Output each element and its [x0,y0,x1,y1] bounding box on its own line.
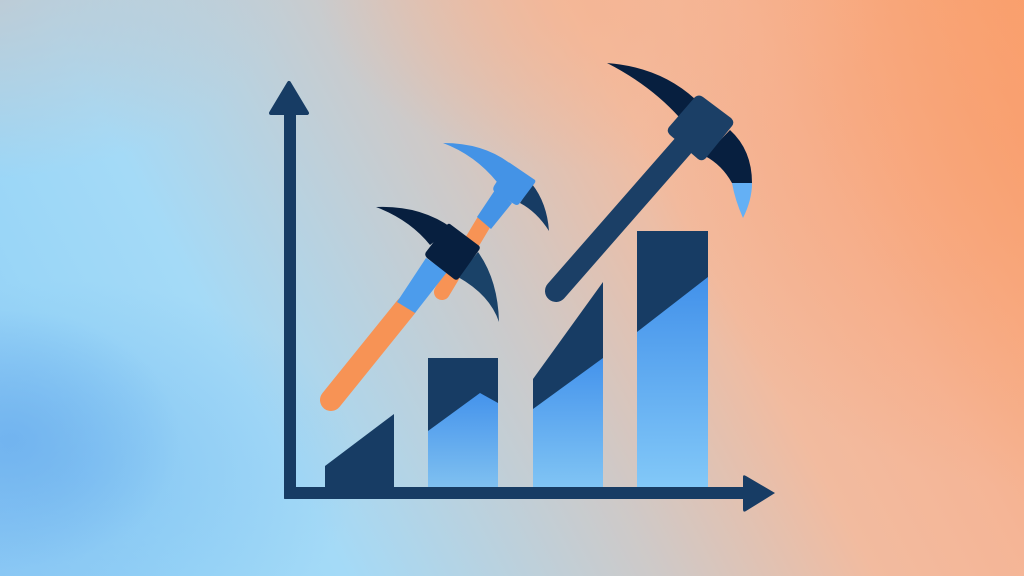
large pickaxe head [668,96,733,160]
back pickaxe handle [442,190,512,292]
bar 1 [325,414,394,490]
axes with arrowheads [271,83,775,512]
bar 2 [428,358,498,487]
large pickaxe handle [556,147,682,291]
large pickaxe blades [607,63,752,218]
back pickaxe head [493,163,535,205]
bar 3 [533,282,603,487]
front pickaxe handle [331,258,447,400]
large pickaxe [556,63,752,291]
front pickaxe [331,207,499,400]
front pickaxe head [425,224,480,280]
front pickaxe blades [376,207,499,322]
back pickaxe [442,143,549,292]
bar 4 [637,231,708,487]
back pickaxe blades [443,143,549,231]
